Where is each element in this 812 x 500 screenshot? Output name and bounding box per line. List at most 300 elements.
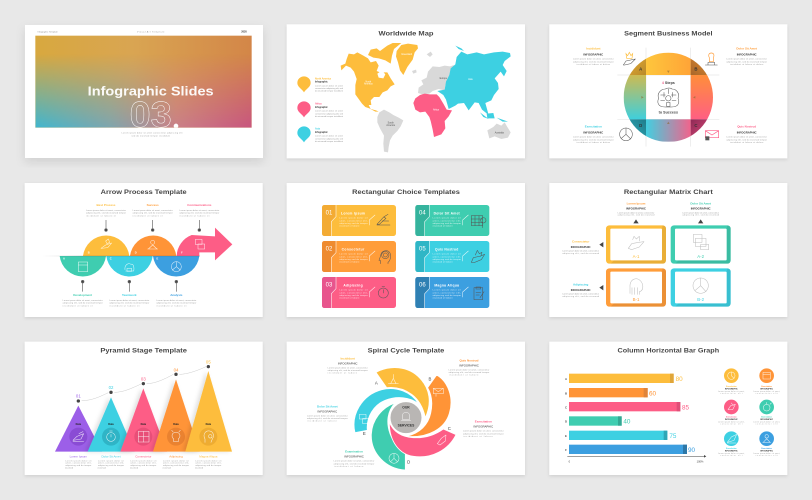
step text: best process: Lorem ipsum dolor sit amet, consectetur [86,209,126,212]
spiral text dolor sit amet [307,404,348,423]
icon: calendar [78,262,88,272]
segment A block: Incididunt [586,47,600,51]
choice 06: eiusmod ut labore [433,297,453,300]
segment D block: incididunt ut labore et dolore [577,141,611,144]
bar E: E [565,435,567,438]
choice 02 [322,241,396,272]
segment B block: adipiscing elit, sed do eiusmod tempor [726,60,767,63]
step letters: A [63,257,65,261]
matrix side label adipiscing: Lorem ipsum dolor sit amet, consectetur [562,293,599,296]
data labels: Data [173,423,179,426]
icon: hand with crown [623,52,635,65]
segment B block: INFOGRAPHIC [737,53,757,57]
center circle: OUR [402,406,410,410]
stage connector curve [77,365,210,403]
legend item pink: Exercitation [726,416,737,419]
stage 2 triangle [88,397,135,452]
step text: development: incididunt ut labore et [63,304,93,307]
stage numbers: 04 [174,367,179,372]
panel: rectangular choice templates [287,183,525,317]
matrix top label dolor sit amet: Dolor Sit Amet [690,202,711,206]
choice 03: Lorem ipsum dolor sit [339,289,368,292]
spiral text exercitation: Lorem ipsum dolor sit amet, consectetur [463,430,504,433]
map labels: Europe [440,77,448,80]
legend item blue: consectetur elit [756,454,778,457]
stage numbers: 05 [206,359,211,364]
icon: brain [658,88,679,107]
stage text dolor sit amet: eiusmod [98,467,107,469]
legend item orange: INFOGRAPHIC [760,387,774,390]
matrix side label consectetur: adipiscing elit, sed do eiusmod [562,252,600,255]
pyramid card [25,342,263,475]
spiral card [287,342,525,475]
spiral text incididunt [328,356,368,375]
map card [287,24,525,158]
petal: cyan [354,389,418,433]
segment letters [639,67,698,128]
bar C: 85 [682,404,690,411]
map labels: Africa [433,109,440,112]
segment card [549,24,787,158]
choice 04: eiusmod ut labore [433,225,453,228]
choice 05: Lorem ipsum dolor sit [433,253,461,256]
petal icons [359,374,446,463]
step text: teamwork: adipiscing elit, sed do eiusmod tempor [109,302,150,305]
pink arrow [177,228,232,260]
map legend: north america: Lorem ipsum dolor sit amet [315,84,343,87]
stage text dolor sit amet: adipiscing sed do tempor [98,464,124,467]
spiral text quis nostrud: INFOGRAPHIC [459,363,479,367]
step text: success: Success [147,203,159,207]
stage text adipiscing: Adipiscing [169,454,183,458]
asia [437,46,511,122]
bar graph card [549,342,787,475]
step text: communications: Communications [187,203,212,207]
icon: hand [101,239,112,248]
stage text adipiscing: eiusmod [163,467,172,469]
outlined number 03: 03 [130,94,172,135]
choice 03: 03 [326,283,333,289]
petal: yellow [376,368,429,418]
spiral text dolor sit amet: adipiscing elit, sed do eiusmod tempor [307,417,348,420]
spiral text dolor sit amet: Lorem ipsum dolor sit amet, consectetur [307,414,348,417]
choice 01: adipiscing sed do tempor [339,222,368,225]
segment guide lines [617,48,719,147]
matrix cell B-2: B-2 [697,297,705,302]
matrix cell A-2 [671,225,731,264]
bar B [565,388,657,397]
south america [377,110,403,152]
stage text adipiscing: adipiscing sed do tempor [163,464,189,467]
map labels: Greenland [401,53,413,56]
choice 05: Quis Nostrud [435,247,458,251]
panel: column horizontal bar graph [549,342,787,475]
petal letters: E [363,431,366,436]
segment C block [726,125,767,144]
choice 06: Magna Aliqua [434,283,459,287]
stage text adipiscing: Lorem ipsum dolor sit [163,459,189,462]
icon: cloud [125,264,134,271]
bar D [565,416,631,426]
stage text magna aliqua: Lorem ipsum dolor sit [195,459,222,462]
cover header text [38,31,247,34]
step letters [63,251,183,261]
choice 04 [415,205,489,236]
bar A: A [565,378,567,381]
legend item cyan [718,431,745,457]
segment C block: adipiscing elit, sed do eiusmod tempor [726,138,767,141]
matrix side label adipiscing: adipiscing elit, sed do eiusmod [562,295,600,298]
segment D block: INFOGRAPHIC [583,131,603,135]
step text: analysis: Analysis [170,293,183,297]
legend item yellow: Lorem ipsum dolor sit amet, [718,390,745,393]
legend item cyan: Exercitation [726,447,737,450]
spiral text incididunt: INFOGRAPHIC [338,361,357,365]
cover header text: Visual Art Template [137,31,165,34]
legend item teal: INFOGRAPHIC [760,418,774,421]
bar B: 60 [649,390,657,397]
horizontal shadow line [42,255,200,257]
matrix top label lorem ipsum: Lorem ipsum dolor sit amet, consectetur [618,211,655,214]
bar F: 90 [688,447,696,454]
choice 05: amet, consectetur elit, [433,255,461,258]
segment A block: incididunt ut labore et dolore [577,63,611,66]
choice 03: eiusmod ut labore [339,297,360,300]
australia [487,122,511,139]
stage 4 triangle [153,379,200,452]
stage text consectetur: Consectetur [135,454,151,458]
petal: teal [371,403,405,470]
step text: success: incididunt ut labore et [133,214,163,217]
stage text consectetur: Lorem ipsum dolor sit [130,459,157,462]
spiral text exercitation [463,420,504,438]
choice 06 [415,277,489,308]
map legend: north america: do eiusmod tempor incididunt [315,90,343,93]
spiral text examination: Lorem ipsum dolor sit amet, consectetur [334,460,375,463]
matrix side label consectetur [562,240,603,255]
bar D: D [565,421,567,424]
legend item teal: consectetur elit [756,423,778,426]
step text: analysis: adipiscing elit, sed do eiusmod tempor [156,302,197,305]
choice 01: 01 [326,211,333,217]
choice 06: amet, consectetur elit, [433,291,461,294]
segment A block [573,47,614,66]
choice 04: amet, consectetur elit, [433,219,461,222]
stage text magna aliqua [195,454,222,469]
choice 05: eiusmod ut labore [433,261,453,264]
legend item orange [753,368,781,395]
cover subtitle: sed do eiusmod tempor incididunt [131,135,170,138]
step letters: C [110,257,112,261]
icon: person [148,240,158,249]
legend item pink: INFOGRAPHIC [725,418,738,421]
bar axis: 100% [697,459,704,463]
choice 06: Lorem ipsum dolor sit [433,289,461,292]
matrix cell B-2 [671,268,731,307]
petal letters: A [375,380,378,385]
spiral text quis nostrud: Lorem ipsum dolor sit amet, consectetur [449,368,490,371]
stage text dolor sit amet [98,454,124,469]
matrix top label lorem ipsum: Lorem Ipsum [627,202,646,206]
stage 5 triangle [185,371,232,452]
choice 06: 06 [419,283,426,289]
cover subtitle [122,132,183,138]
center circle [390,402,422,434]
segment D block: adipiscing elit, sed do eiusmod tempor [573,138,614,141]
map labels: Australia [495,132,505,135]
icon: screens [195,239,205,249]
upper half circles [83,235,176,256]
legend item blue [753,431,781,457]
bar E: 75 [669,433,677,440]
stage numbers: 01 [76,394,81,399]
arrow process heading: Arrow Process Template [101,189,187,196]
step text: best process: Best Process [97,203,116,207]
lower half circles [60,256,199,277]
spiral text exercitation: adipiscing elit, sed do eiusmod tempor [463,432,504,435]
segment A block: adipiscing elit, sed do eiusmod tempor [573,60,614,63]
choice 04: adipiscing sed do tempor [433,222,461,225]
petal letters [363,376,451,465]
stage text lorem ipsum: eiusmod [65,467,74,469]
cover header text: 2020 [241,31,247,34]
map legend: north america [297,76,344,93]
stage 1 triangle [55,406,102,452]
spiral text incididunt: incididunt ut labore [328,372,358,375]
legend item pink: Lorem ipsum dolor sit amet, [718,421,745,424]
map legend: africa: Africa [315,103,322,106]
matrix heading: Rectangular Matrix Chart [624,189,714,196]
segment C block: Quis Nostrud [737,125,756,129]
segment A block: Lorem ipsum dolor sit amet, consectetur [573,58,614,61]
legend item pink: consectetur elit [720,423,743,426]
choice 02: 02 [326,247,333,253]
petal: orange [406,375,451,437]
stage text lorem ipsum: amet, consectetur elit, [65,462,92,465]
legend item orange: Exercitation [761,385,772,388]
matrix top label dolor sit amet: Lorem ipsum dolor sit amet, consectetur [682,211,719,214]
matrix top label lorem ipsum: adipiscing elit, sed do eiusmod [618,214,655,217]
bar C: C [565,406,567,409]
center text [659,81,678,115]
petal letters: B [429,376,432,381]
matrix top label lorem ipsum [618,202,655,223]
segment letters: C [694,123,698,128]
stage 3 triangle [120,388,167,452]
segment C block: Lorem ipsum dolor sit amet, consectetur [726,136,767,139]
choice 02: Lorem ipsum dolor sit [339,253,368,256]
europe [418,65,454,94]
bar axis: 0 [569,459,571,463]
segment direction arrows [641,71,695,124]
matrix card [549,183,787,317]
icon: pie chart [620,128,632,141]
stage numbers [76,359,211,399]
iceland and islands [412,52,433,74]
choice 03 [322,277,396,308]
white lakes in north america [377,70,385,78]
petal letters: D [407,460,410,465]
choice 01: Lorem Ipsum [341,211,365,215]
spiral text dolor sit amet: incididunt ut labore [307,420,337,423]
bar D: 40 [623,419,631,426]
center text: 4 Steps [662,81,675,85]
map legend: north america: North America [315,77,332,80]
map legend: asia: Infographic [315,132,328,134]
step letters: F [181,251,183,255]
bar C [565,402,690,411]
segment letters: A [639,67,643,72]
map legend: asia: do eiusmod tempor incididunt [315,140,343,143]
matrix cell B-1 [606,268,666,307]
map legend: africa: consectetur adipiscing elit, sed [315,112,344,115]
segment C block: incididunt ut labore et dolore [730,141,764,144]
map legend: asia: Asia [315,128,321,131]
stage text dolor sit amet: Lorem ipsum dolor sit [98,459,124,462]
step text: analysis [156,293,197,307]
stage text adipiscing [163,454,189,469]
cover title: Infographic Slides [88,84,214,98]
legend item blue: Exercitation [761,447,772,450]
map heading: Worldwide Map [378,31,433,38]
data labels: Data [108,423,114,426]
step text: success [133,203,173,217]
step text: teamwork: incididunt ut labore et [109,304,140,307]
data labels [76,423,212,426]
choice 02: adipiscing sed do tempor [339,258,368,261]
arrow process card [25,183,263,317]
gradient banner [35,36,252,128]
legend item blue: INFOGRAPHIC [760,449,774,452]
choice card [287,183,525,317]
legend item orange: Lorem ipsum dolor sit amet, [753,390,781,393]
spiral text quis nostrud: Quis Nostrud [460,358,479,362]
step text: analysis: Lorem ipsum dolor sit amet, consectetur [156,299,197,302]
spiral diagram [354,368,456,470]
stage text lorem ipsum: Lorem ipsum dolor sit [65,459,92,462]
stage text consectetur: adipiscing sed do tempor [130,464,157,467]
legend item teal [753,400,781,426]
choice heading: Rectangular Choice Templates [352,189,460,196]
stage numbers: 03 [141,377,146,382]
choice 01 [322,205,396,236]
panel: pyramid stage template [25,342,263,475]
data labels: Data [206,423,212,426]
choice 06: adipiscing sed do tempor [433,294,461,297]
bar E [565,431,677,440]
spiral text dolor sit amet: INFOGRAPHIC [318,409,337,413]
panel: spiral cycle template [287,342,525,475]
matrix side label adipiscing: INFOGRAPHIC [571,288,591,292]
map legend: north america: Infographic [315,82,328,84]
matrix top label dolor sit amet: adipiscing elit, sed do eiusmod [682,214,720,217]
map legend: africa: Lorem ipsum dolor sit amet [315,110,343,113]
bottom pointers [81,280,178,292]
step text: best process: adipiscing elit, sed do eiusmod tempor [86,212,126,215]
petal letters: C [448,426,451,431]
spiral text exercitation: INFOGRAPHIC [474,425,493,429]
spiral text exercitation: incididunt ut labore [463,435,493,438]
matrix cell A-1: A-1 [633,254,640,259]
legend item pink [718,400,745,426]
pyramid heading: Pyramid Stage Template [100,347,187,354]
cover header text: Infographic Template [38,31,58,34]
step letters: B [88,251,90,255]
spiral text incididunt: Incididunt [341,356,355,360]
step text: communications: Lorem ipsum dolor sit amet, consectetur [179,209,220,212]
segment D block: Lorem ipsum dolor sit amet, consectetur [573,136,614,139]
icon: bulb on stand [705,53,717,65]
spiral text quis nostrud [449,358,490,377]
legend item cyan: INFOGRAPHIC [725,449,738,452]
legend item yellow [718,368,745,395]
matrix side label consectetur: Consectetur [572,240,590,244]
panel: rectangular matrix chart [549,183,787,317]
matrix side label consectetur: Lorem ipsum dolor sit amet, consectetur [562,250,599,253]
stage text dolor sit amet: Dolor Sit Amet [101,454,121,458]
stage text magna aliqua: eiusmod [195,467,204,469]
segment letters: D [639,123,642,128]
matrix top label dolor sit amet: INFOGRAPHIC [691,207,711,211]
map legend: asia [297,126,344,143]
choice 05: adipiscing sed do tempor [433,258,461,261]
stage text consectetur: eiusmod [130,467,139,469]
matrix side label consectetur: INFOGRAPHIC [571,245,591,249]
north america [341,43,418,112]
africa [413,94,452,137]
segment A block: INFOGRAPHIC [583,53,603,57]
legend item orange: consectetur elit [756,392,778,395]
icon: envelope [705,131,719,140]
choice 01: eiusmod ut labore [339,225,360,228]
icon: pie [171,262,181,272]
segment C block: INFOGRAPHIC [737,131,757,135]
stage text lorem ipsum: Lorem Ipsum [70,454,88,458]
step text: success: Lorem ipsum dolor sit amet, consectetur [133,209,173,212]
stage text consectetur: amet, consectetur elit, [130,462,157,465]
stage text consectetur [130,454,157,469]
step text: development: Development [73,293,92,297]
matrix cell A-2: A-2 [697,254,705,259]
choice 04: Dolor Sit Amet [434,211,461,215]
stage numbers: 02 [109,385,114,390]
center circle: SERVICES [398,423,415,427]
legend item cyan: Lorem ipsum dolor sit amet, [718,452,745,455]
cover subtitle: Lorem ipsum dolor sit amet consectetur adipiscing elit [122,132,183,135]
step text: communications: adipiscing elit, sed do eiusmod tempor [179,212,220,215]
spiral text incididunt: adipiscing elit, sed do eiusmod tempor [328,369,368,372]
map labels: South [388,121,394,124]
top pointers [105,220,201,231]
choice 03: adipiscing sed do tempor [339,294,368,297]
segment D block: Exercitation [585,125,602,129]
step text: best process: incididunt ut labore et [86,214,116,217]
map legend: north america: consectetur adipiscing elit, sed [315,87,344,90]
choice 05 [415,241,489,272]
map labels: America [386,124,396,127]
matrix cell B-1: B-1 [633,297,640,302]
map legend: africa [297,101,344,118]
legend item cyan: consectetur elit [720,454,743,457]
map legend: africa: do eiusmod tempor incididunt [315,115,343,118]
bar graph heading: Column Horizontal Bar Graph [617,347,719,354]
petal: pink [389,422,456,457]
segment letters: B [694,67,698,72]
step text: analysis: incididunt ut labore et [156,304,187,307]
step text: teamwork: Lorem ipsum dolor sit amet, consectetur [109,299,150,302]
stage text adipiscing: amet, consectetur elit, [163,462,189,465]
map legend: africa: Infographic [315,107,328,109]
